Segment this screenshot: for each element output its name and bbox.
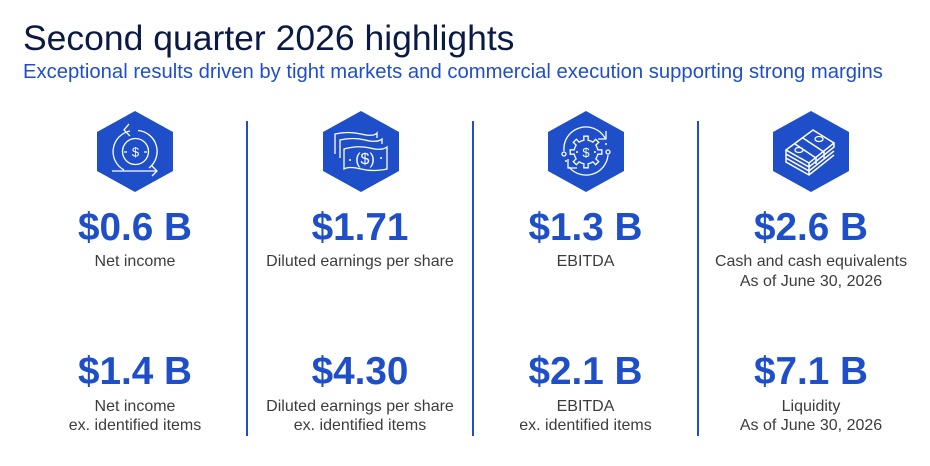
metric: EBITDA: $1.3 B xyxy=(528,206,642,249)
title: Second quarter 2026 highlights xyxy=(23,18,514,58)
metric: cash xyxy=(715,206,907,290)
metric: EBITDA: EBITDA xyxy=(557,253,614,270)
metric: diluted EPS ex items xyxy=(266,350,454,434)
metric: net income ex items: Net income xyxy=(95,398,175,415)
metric: liquidity: $7.1 B xyxy=(754,350,868,393)
metric: EBITDA xyxy=(528,206,642,270)
icon: circular arrow with dollar coin: $ xyxy=(132,144,140,160)
metric: cash: $2.6 B xyxy=(754,206,868,249)
metric: net income ex items: ex. identified items xyxy=(69,417,201,434)
metric: liquidity xyxy=(740,350,882,434)
icon: banknotes: ($) xyxy=(355,151,375,168)
metric: EBITDA ex items: EBITDA xyxy=(557,398,614,415)
metric: net income xyxy=(78,206,192,270)
metric: diluted EPS ex items: $4.30 xyxy=(312,350,408,393)
metric: diluted EPS: Diluted earnings per share xyxy=(266,253,454,270)
metric: cash: Cash and cash equivalents xyxy=(715,253,907,270)
metric: EBITDA ex items xyxy=(519,350,652,434)
icon: gear with dollar and arrows xyxy=(548,111,624,192)
metric: EBITDA ex items: $2.1 B xyxy=(528,350,642,393)
metric: net income ex items xyxy=(69,350,201,434)
metric: diluted EPS ex items: ex. identified items xyxy=(294,417,426,434)
icon: stack of cash xyxy=(773,111,849,192)
icon: banknotes xyxy=(323,111,399,192)
metric: diluted EPS xyxy=(266,206,454,270)
metric: diluted EPS: $1.71 xyxy=(312,206,408,249)
metric: net income: Net income xyxy=(95,253,175,270)
metric: EBITDA ex items: ex. identified items xyxy=(519,417,652,434)
icon: gear with dollar and arrows: $ xyxy=(582,145,590,160)
subtitle: Exceptional results driven by tight markets and commercial execution supporting strong margins xyxy=(23,61,883,83)
metric: diluted EPS ex items: Diluted earnings per share xyxy=(266,398,454,415)
metric: liquidity: Liquidity xyxy=(782,398,840,415)
metric: cash: As of June 30, 2026 xyxy=(740,273,882,290)
metric: net income: $0.6 B xyxy=(78,206,192,249)
icon: circular arrow with dollar coin xyxy=(97,111,173,192)
metric: net income ex items: $1.4 B xyxy=(78,350,192,393)
metric: liquidity: As of June 30, 2026 xyxy=(740,417,882,434)
